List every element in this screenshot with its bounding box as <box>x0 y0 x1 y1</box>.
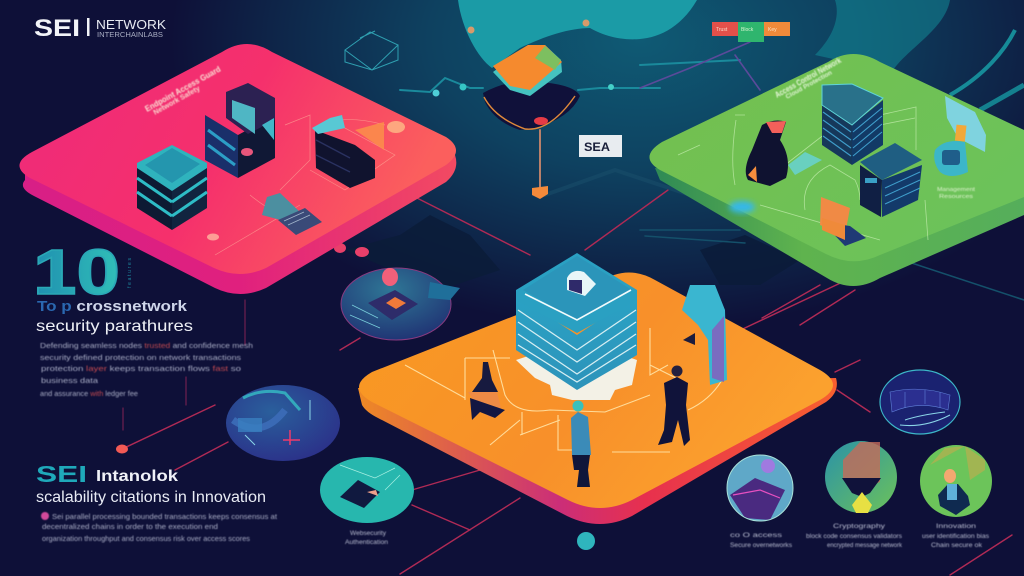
logo: INTERCHAINLABS <box>97 32 163 39</box>
captions: Secure overnetworks <box>730 542 793 549</box>
panel: green platform <box>649 54 1024 286</box>
panel: orange platform <box>358 253 837 524</box>
heading: top network security features <box>36 298 193 335</box>
logo: NETWORK <box>96 17 166 32</box>
tag: colour legend <box>712 22 790 42</box>
wireframe icon top centre-left <box>345 31 440 96</box>
person: standing right <box>658 366 690 446</box>
circle: crystal <box>727 455 793 521</box>
captions: Websecurity <box>350 530 387 537</box>
heading: SEI scalability: Intanolok <box>96 468 178 485</box>
captions <box>345 523 990 549</box>
nodes beside pink platform <box>334 243 369 257</box>
tag: white label: SEA <box>584 140 610 154</box>
text block: innovation description: organization throughput and consensus risk over access scores <box>42 534 250 543</box>
bubble: teal circle <box>320 457 414 523</box>
panel: green platform: Cloud Protection <box>785 69 833 101</box>
text block: features description: business data <box>41 376 99 385</box>
heading: top network security features: security parathures <box>36 318 193 335</box>
text block: innovation description: Sei parallel processing bounded transactions keeps consensus at <box>52 512 278 521</box>
logo: SEI <box>34 15 80 42</box>
captions: Innovation <box>936 523 977 530</box>
platform label text: Access Control Network <box>774 56 843 100</box>
text block: innovation description: decentralized chains in order to the execution end <box>42 522 218 531</box>
central server stack with padlock <box>516 253 637 400</box>
tag: colour legend: Key <box>768 27 777 33</box>
dark device block <box>312 115 405 188</box>
node: bottom teal dot <box>577 532 595 550</box>
circuit traces <box>678 107 928 240</box>
circuit traces <box>215 115 395 255</box>
server tower front <box>860 143 922 217</box>
laptop <box>262 193 322 235</box>
device <box>934 141 968 176</box>
text block: features description: and assurance with ledger fee <box>40 389 138 398</box>
captions: Authentication <box>345 539 388 546</box>
panel: pink platform: Network Safety <box>153 85 202 117</box>
big number 10: features <box>127 258 133 288</box>
text block: features description: protection layer keeps transaction flows fast so <box>41 364 241 373</box>
captions: encrypted message network <box>827 542 903 549</box>
bubble: chip dome <box>341 268 460 340</box>
circle: lamp <box>825 441 897 513</box>
captions: Cryptography <box>833 523 886 530</box>
floating screen <box>945 96 986 152</box>
big number 10: 10 <box>33 236 120 308</box>
person: seated <box>468 362 505 420</box>
heading: SEI scalability <box>36 461 266 506</box>
platform label text: Endpoint Access Guard <box>143 64 222 114</box>
glow node <box>729 201 755 213</box>
tag: colour legend: Trust <box>716 27 728 33</box>
heading: SEI scalability: SEI <box>36 461 87 487</box>
text block: innovation description <box>41 512 278 543</box>
bubble: wireframe globe right <box>880 370 960 434</box>
hooded figure <box>746 121 822 186</box>
text block: features description: Defending seamless nodes trusted and confidence mesh <box>40 341 253 350</box>
tag: colour legend: Block <box>741 27 754 33</box>
caption text: Management <box>937 187 976 193</box>
person: glass hologram <box>682 285 727 385</box>
captions: block code consensus validators <box>806 533 903 540</box>
bubble: purple data globe <box>226 385 340 461</box>
node: red pin <box>116 444 128 454</box>
heading: top network security features: To p crossnetwork <box>37 298 188 315</box>
tag: white label <box>579 135 622 157</box>
padlock <box>567 271 596 296</box>
panel: pink platform <box>19 44 456 294</box>
captions: Chain secure ok <box>931 542 983 549</box>
server cube tall <box>205 83 275 178</box>
heading: SEI scalability: scalability citations in Innovation <box>36 489 266 506</box>
logo <box>34 15 166 42</box>
server stack <box>137 145 207 230</box>
laptop orange <box>820 197 866 246</box>
circle: person portrait <box>920 445 992 517</box>
circuit traces <box>405 310 722 452</box>
text block: features description <box>40 341 253 398</box>
panel: green platform: Resources <box>939 194 973 200</box>
person: front <box>571 400 591 487</box>
text block: features description: security defined protection on network transactions <box>40 353 241 362</box>
server tower back <box>822 84 883 165</box>
captions: user identification bias <box>922 533 990 540</box>
captions: co O access <box>730 532 783 539</box>
top centre emblem <box>460 20 614 199</box>
